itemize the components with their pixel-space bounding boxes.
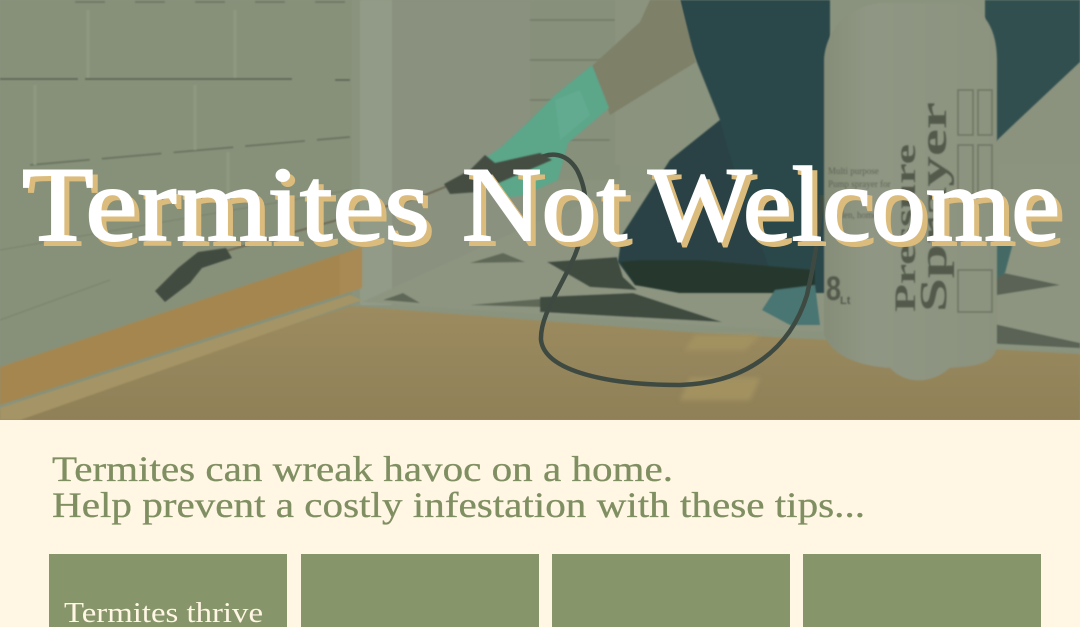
intro text xyxy=(52,449,865,525)
tip card 2 xyxy=(301,554,539,627)
pressure sprayer bottle xyxy=(824,3,997,380)
title: Welcome xyxy=(648,146,1060,263)
tip card 4 xyxy=(803,554,1041,627)
tip card 1 xyxy=(49,554,287,627)
bottle label text: 8 xyxy=(826,270,841,308)
tip card 3 xyxy=(552,554,790,627)
skirting board xyxy=(0,247,362,420)
intro text: Help prevent a costly infestation with these tips... xyxy=(52,485,865,525)
arm and gloved hand xyxy=(482,0,696,198)
intro text: Termites can wreak havoc on a home. xyxy=(52,449,673,489)
bottle label text: Lt xyxy=(840,295,851,307)
spray wand xyxy=(155,153,552,302)
chequered floor xyxy=(383,253,1080,348)
cream content background xyxy=(0,420,1080,627)
spray hose xyxy=(535,155,822,385)
bottle label text: Sprayer xyxy=(913,102,955,312)
bottle small print xyxy=(828,166,890,220)
technician legs xyxy=(618,0,1080,325)
bottle small print: Multi purpose xyxy=(828,166,879,176)
title xyxy=(22,146,1060,263)
bottle pictograms xyxy=(958,90,992,312)
bottle small print: Pump sprayer for xyxy=(828,179,890,189)
bottle small print: garden, home xyxy=(828,210,877,220)
brick wall xyxy=(0,0,350,320)
wooden floor xyxy=(0,306,1080,420)
bottle label text xyxy=(826,102,955,312)
title: Termites xyxy=(22,146,430,263)
hero photo: technician spraying for termites xyxy=(0,0,1080,420)
white door frame and wall panel xyxy=(361,1,615,304)
bottle label text: Pressure xyxy=(889,144,922,312)
title: Not xyxy=(462,146,627,263)
